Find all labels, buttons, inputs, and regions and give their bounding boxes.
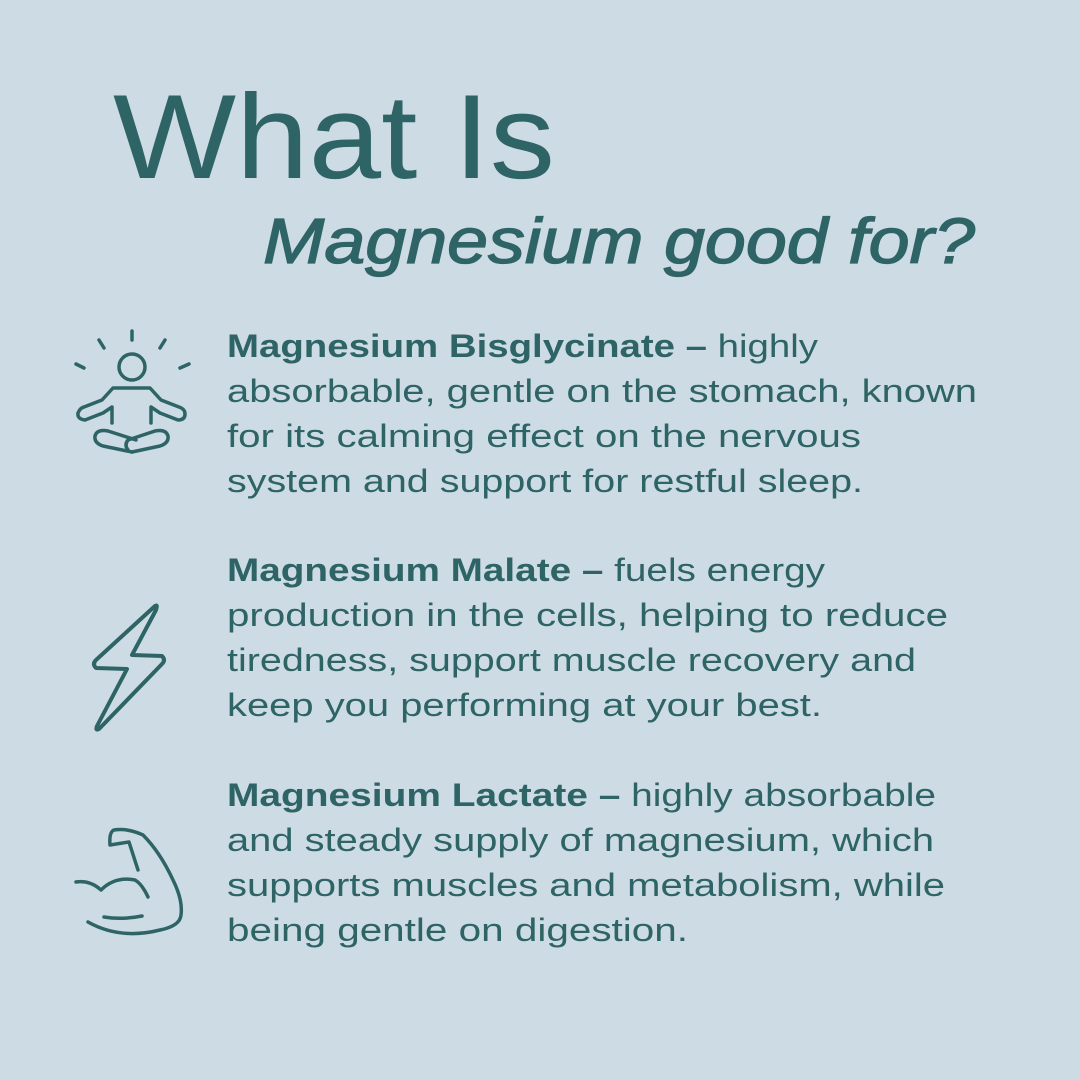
text block: bisglycinate bbox=[227, 328, 977, 499]
text block: lactate: Magnesium Lactate – highly absorbable bbox=[227, 777, 936, 813]
text block: lactate bbox=[227, 777, 945, 948]
text block: malate: Magnesium Malate – fuels energy bbox=[227, 552, 825, 588]
title bbox=[113, 70, 975, 277]
text block: malate: tiredness, support muscle recovery and bbox=[227, 642, 916, 678]
subtitle: Magnesium good for? bbox=[263, 205, 975, 277]
text block: lactate: supports muscles and metabolism, while bbox=[227, 867, 945, 903]
text block: bisglycinate: for its calming effect on the nervous bbox=[227, 418, 861, 454]
title: What Is bbox=[113, 70, 555, 204]
text block: lactate: being gentle on digestion. bbox=[227, 912, 688, 948]
text block: bisglycinate: system and support for restful sleep. bbox=[227, 463, 863, 499]
icon: flexed arm bbox=[76, 830, 181, 934]
text block: malate: keep you performing at your best. bbox=[227, 687, 822, 723]
text block: bisglycinate: absorbable, gentle on the stomach, known bbox=[227, 373, 977, 409]
text block: bisglycinate: Magnesium Bisglycinate – highly bbox=[227, 328, 818, 364]
text block: lactate: and steady supply of magnesium, which bbox=[227, 822, 934, 858]
text block: malate: production in the cells, helping to reduce bbox=[227, 597, 948, 633]
text block: malate bbox=[227, 552, 948, 723]
icon: meditation bbox=[76, 331, 189, 452]
icon: lightning bolt bbox=[94, 606, 164, 730]
